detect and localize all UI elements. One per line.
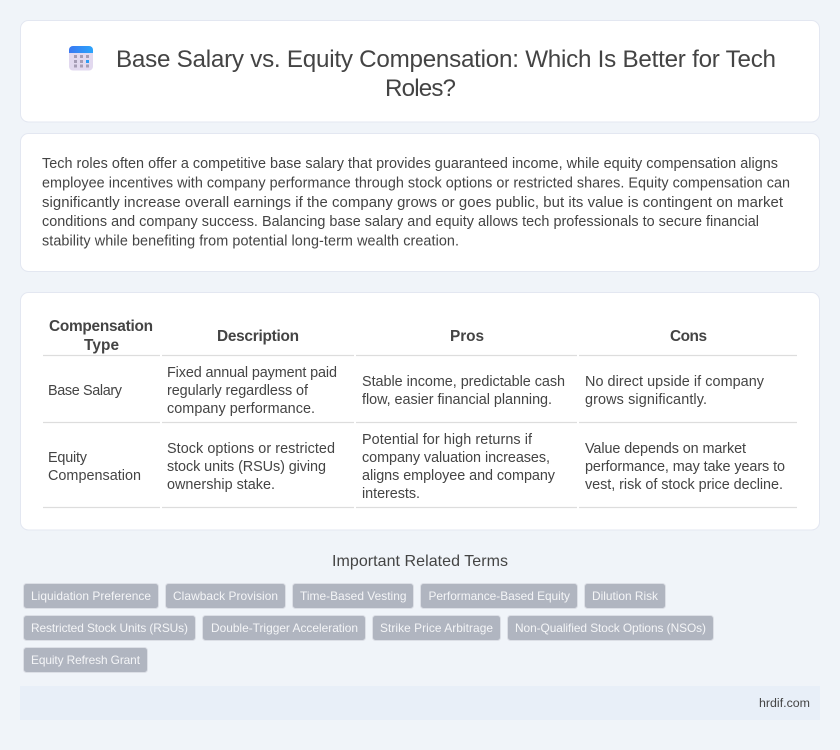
table row: base salary: Fixed annual payment paid [167, 365, 337, 381]
text block: intro: employee incentives with company performance through stock options or restricted shares. Equity compensation can [42, 176, 790, 192]
text block: intro: significantly increase overall earnings if the company grows or goes public, but its value is contingent on market [42, 195, 784, 211]
title: Roles? [385, 75, 456, 102]
table row: equity compensation [48, 432, 785, 502]
table header: Compensation [49, 318, 153, 335]
table row: base salary [48, 365, 765, 417]
table header: Description [217, 328, 299, 345]
table row: equity compensation: Potential for high returns if [362, 432, 533, 448]
panel: header [20, 20, 820, 122]
tag list: related terms: Liquidation Preference [31, 589, 151, 603]
table row: equity compensation: Stock options or restricted [167, 441, 335, 457]
icon: calendar [69, 46, 93, 70]
table row: base salary: Base Salary [48, 383, 123, 399]
table row: base salary: No direct upside if company [585, 374, 765, 390]
panel: comparison table [20, 292, 820, 530]
table header: Type [84, 337, 119, 354]
table row: equity compensation: company valuation increases, [362, 450, 550, 466]
table header [49, 318, 707, 354]
tag list: related terms: Clawback Provision [173, 589, 278, 603]
table row: equity compensation: Equity [48, 450, 88, 466]
table header: Cons [670, 328, 707, 345]
text block: intro: stability while benefiting from potential long-term wealth creation. [42, 234, 459, 250]
table row: equity compensation: ownership stake. [167, 477, 275, 493]
table row: base salary: company performance. [167, 401, 315, 417]
table row: equity compensation: vest, risk of stock price decline. [585, 477, 783, 493]
table row: base salary: regularly regardless of [167, 383, 309, 399]
tag list: related terms: Time-Based Vesting [300, 589, 406, 603]
table row: equity compensation: Compensation [48, 468, 141, 484]
text block: intro: conditions and company success. Balancing base salary and equity allows tech professionals to secure financial [42, 214, 759, 230]
title: Base Salary vs. Equity Compensation: Which Is Better for Tech [116, 46, 776, 73]
footer [20, 686, 820, 720]
panel: intro paragraph [20, 134, 820, 272]
tag list: related terms: Strike Price Arbitrage [380, 621, 493, 635]
title [116, 46, 776, 102]
table row: equity compensation: stock units (RSUs) giving [167, 459, 326, 475]
table row: base salary: flow, easier financial planning. [362, 392, 552, 408]
tag list: related terms: Dilution Risk [592, 589, 658, 603]
tag list: related terms: Double-Trigger Acceleration [211, 621, 358, 635]
table row: equity compensation: interests. [362, 486, 420, 502]
table header: Pros [450, 328, 484, 345]
table row: base salary: Stable income, predictable cash [362, 374, 565, 390]
tag list: related terms: Equity Refresh Grant [31, 653, 141, 667]
text block: intro: Tech roles often offer a competitive base salary that provides guaranteed income, while equity compensation aligns [42, 156, 778, 172]
tag list: related terms: Performance-Based Equity [428, 589, 570, 603]
tag list: related terms: Restricted Stock Units (RSUs) [31, 621, 188, 635]
tag list: related terms [24, 584, 714, 672]
table row: equity compensation: aligns employee and company [362, 468, 556, 484]
table row: equity compensation: Value depends on market [585, 441, 746, 457]
footer: hrdif.com [759, 696, 810, 710]
table row: equity compensation: performance, may take years to [585, 459, 785, 475]
tag list: related terms: Non-Qualified Stock Options (NSOs) [515, 621, 706, 635]
text block: intro [42, 156, 790, 250]
heading: related terms: Important Related Terms [332, 553, 508, 570]
table row: base salary: grows significantly. [585, 392, 707, 408]
